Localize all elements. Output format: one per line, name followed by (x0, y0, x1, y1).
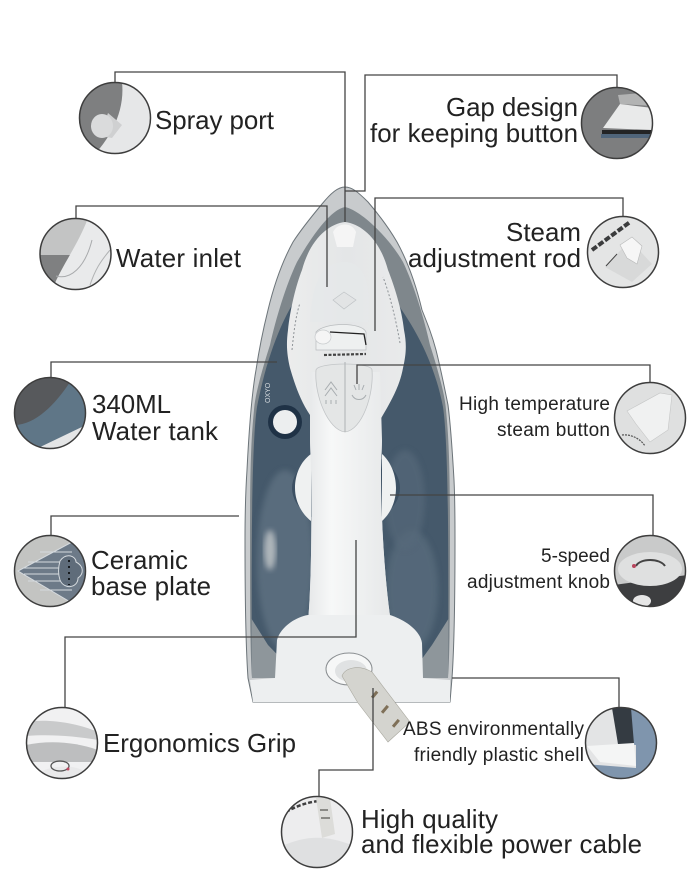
callout: gap design (370, 87, 654, 159)
callout: high temperature button (459, 382, 687, 455)
iron outer shell (245, 187, 455, 702)
callout: water inlet (40, 218, 241, 291)
icon: grip (26, 707, 98, 779)
label line 2: steam button (497, 420, 610, 441)
label line 2: and flexible power cable (361, 831, 642, 859)
icon: knob (614, 535, 687, 608)
label: Ceramic (91, 547, 188, 575)
label line 2: Water tank (92, 418, 218, 446)
icon: steam button (614, 382, 687, 455)
steam slider (315, 324, 366, 355)
label line 2: base plate (91, 573, 211, 601)
label: Gap design (446, 94, 578, 122)
iron blue water tank (252, 305, 448, 678)
callout: ABS shell (403, 707, 657, 779)
label: ABS environmentally (403, 719, 584, 740)
diamond logo (333, 292, 356, 309)
connector lines (51, 72, 653, 797)
handle (308, 372, 391, 622)
icon: spray port (79, 82, 152, 154)
label: Ergonomics Grip (103, 730, 296, 758)
label: Water inlet (116, 245, 241, 273)
callout: water tank (14, 377, 218, 449)
round side button (268, 405, 302, 439)
rear white base (250, 615, 450, 702)
icon: cable (282, 797, 354, 869)
cord socket (326, 653, 372, 685)
callout: adjustment knob (467, 535, 687, 608)
icon: shell (585, 707, 657, 779)
callout: spray port (79, 82, 274, 154)
callout: ceramic base plate (14, 535, 211, 607)
handle lower (308, 440, 391, 622)
iron grey band (250, 207, 450, 678)
icon: water tank (14, 377, 86, 449)
icon: base plate (15, 536, 85, 606)
label line 2: adjustment knob (467, 572, 610, 593)
icon: water inlet (40, 218, 112, 291)
label: 5-speed (541, 546, 610, 567)
iron photo (245, 187, 455, 742)
temperature knob (292, 450, 400, 526)
label line 2: adjustment rod (408, 245, 581, 273)
side dashes (292, 277, 400, 350)
label line 2: for keeping button (370, 120, 578, 148)
callout: steam rod (408, 216, 660, 289)
label: High temperature (459, 394, 610, 415)
label: 340ML (92, 391, 171, 419)
brand mark: OXYO (265, 382, 272, 403)
iron top white body (287, 222, 406, 420)
callout: power cable (282, 796, 642, 869)
filler panel (310, 262, 369, 322)
label: Spray port (155, 107, 274, 135)
label: High quality (361, 806, 498, 834)
label line 2: friendly plastic shell (414, 745, 584, 766)
icon: steam rod (587, 216, 660, 289)
label: Steam (506, 219, 581, 247)
icon: gap design (581, 87, 654, 159)
water inlet cap (333, 224, 356, 247)
callout: ergonomics grip (26, 707, 296, 779)
power cord (342, 668, 410, 742)
button panel (316, 362, 372, 432)
